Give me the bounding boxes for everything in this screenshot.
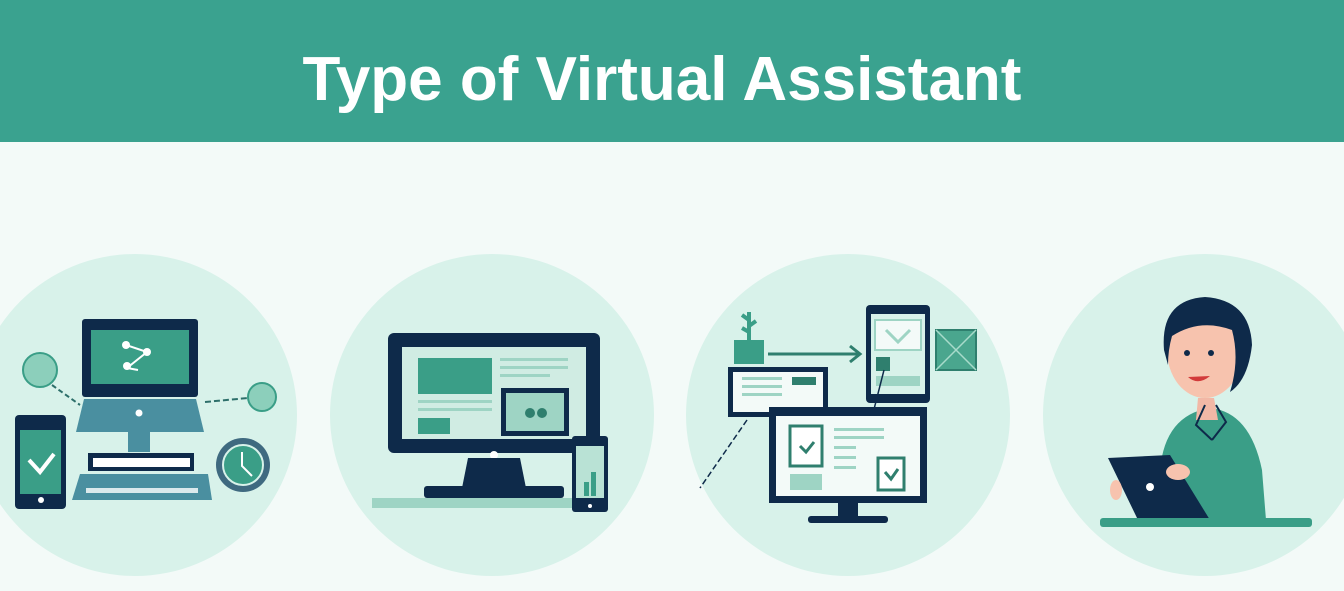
icon: tablet <box>1108 455 1210 520</box>
panel: website monitor <box>330 254 654 576</box>
panel: multi-device <box>686 254 1010 576</box>
icon: phone <box>572 436 608 512</box>
icon: tablet portrait <box>866 305 930 403</box>
icon: large monitor <box>372 333 600 508</box>
icon: desktop monitor <box>72 319 212 500</box>
header band <box>0 0 1344 142</box>
icon: desktop monitor with checks <box>769 407 927 523</box>
title: Type of Virtual Assistant <box>303 45 1021 114</box>
panel: computer network <box>0 254 297 576</box>
desk <box>1100 518 1312 527</box>
icon: gear clock <box>216 438 270 492</box>
icon: crossed box <box>700 330 976 488</box>
icon: tablet landscape <box>728 367 828 417</box>
icon: small nodes <box>23 353 276 411</box>
icon: plant and arrow <box>734 312 860 364</box>
icon: woman <box>1155 297 1266 520</box>
icon: smartphone <box>15 415 66 509</box>
panel: person with tablet <box>1043 254 1344 576</box>
